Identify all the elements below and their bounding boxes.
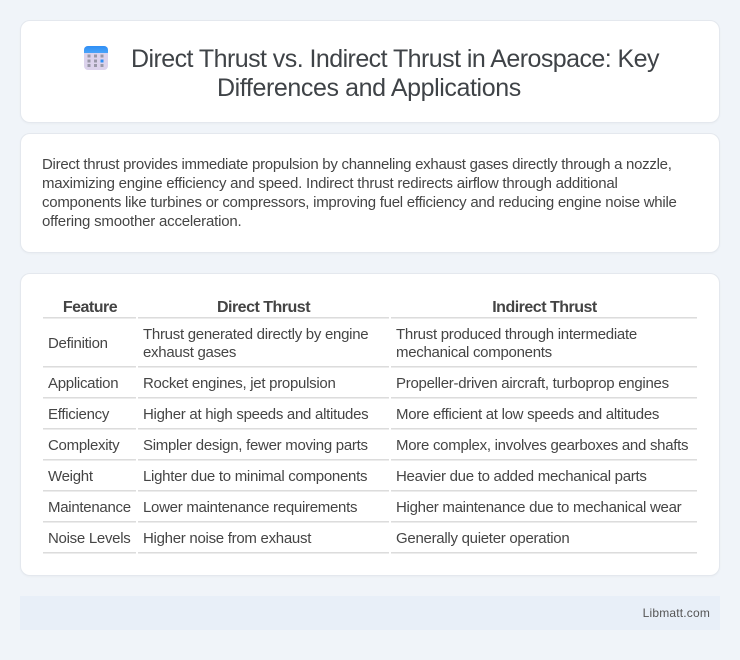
icon: calendar [84, 46, 108, 70]
intro card [20, 133, 720, 253]
table header: Indirect Thrust [492, 299, 597, 316]
table header: Direct Thrust [217, 299, 310, 316]
row: efficiency: Efficiency [48, 406, 109, 423]
row: application: Application [48, 375, 118, 392]
intro text: offering smoother acceleration. [42, 213, 241, 230]
row: definition: Definition [48, 335, 108, 352]
table card: Rocket engines, jet propulsion [143, 375, 336, 392]
intro text: components like turbines or compressors, improving fuel efficiency and reducing engine noise while [42, 194, 677, 211]
row: weight: Weight [48, 468, 93, 485]
intro text: maximizing engine efficiency and speed. Indirect thrust redirects airflow through additional [42, 175, 618, 192]
intro text: Direct thrust provides immediate propulsion by channeling exhaust gases directly through a nozzle, [42, 156, 672, 173]
footer text: Libmatt.com [643, 606, 710, 620]
row: maintenance: Maintenance [48, 499, 131, 516]
table header: Feature [63, 299, 117, 316]
table card [20, 273, 720, 576]
table card: mechanical components [396, 344, 552, 361]
table card: Simpler design, fewer moving parts [143, 437, 368, 454]
table card: Thrust produced through intermediate [396, 326, 637, 343]
table card: More complex, involves gearboxes and shafts [396, 437, 688, 454]
title: Direct Thrust vs. Indirect Thrust in Aerospace: Key [131, 45, 659, 73]
header card [20, 20, 720, 123]
table card: Higher noise from exhaust [143, 530, 311, 547]
table card: Heavier due to added mechanical parts [396, 468, 647, 485]
table card: exhaust gases [143, 344, 236, 361]
table card: Thrust generated directly by engine [143, 326, 368, 343]
title [131, 45, 660, 102]
table card: More efficient at low speeds and altitudes [396, 406, 659, 423]
table card: Lighter due to minimal components [143, 468, 367, 485]
title: Differences and Applications [217, 74, 521, 102]
table card: Higher maintenance due to mechanical wear [396, 499, 681, 516]
table card: Propeller-driven aircraft, turboprop engines [396, 375, 669, 392]
intro text [42, 156, 677, 230]
footer bar [20, 596, 720, 630]
table card: Higher at high speeds and altitudes [143, 406, 368, 423]
table card: Generally quieter operation [396, 530, 569, 547]
row: complexity: Complexity [48, 437, 119, 454]
row: noise levels: Noise Levels [48, 530, 131, 547]
table header [63, 299, 597, 316]
table card: Lower maintenance requirements [143, 499, 357, 516]
